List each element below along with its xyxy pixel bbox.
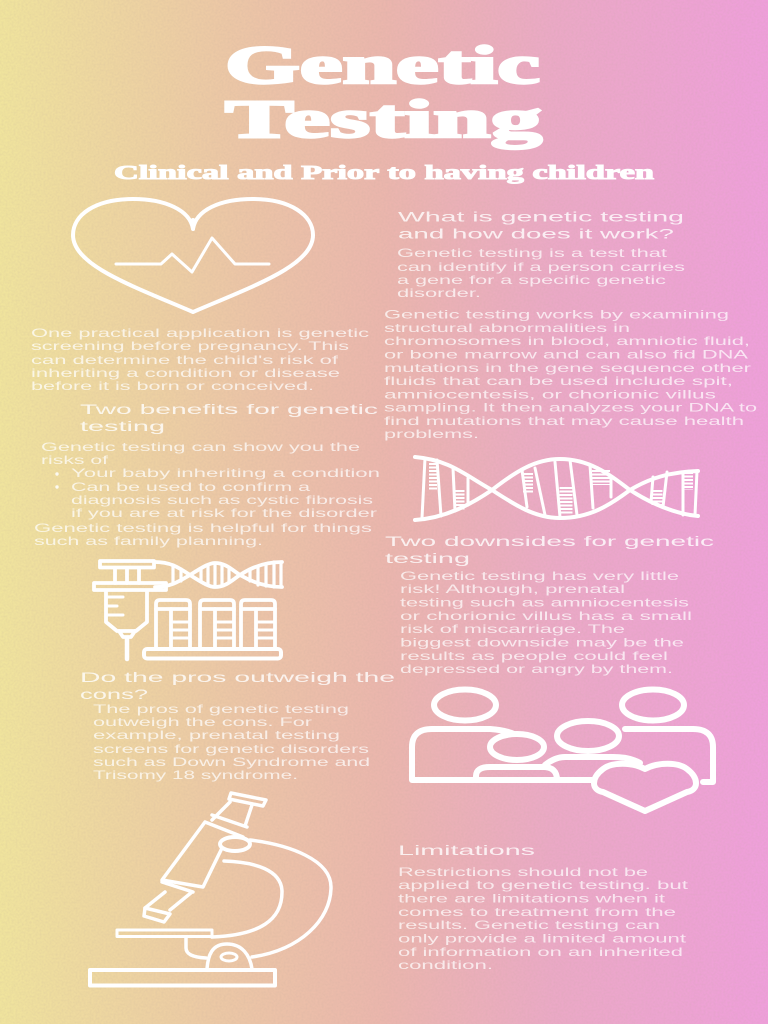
panel: practical application text [31, 326, 369, 393]
text block: how it works: Genetic testing works by examining [384, 308, 729, 322]
heading: what is genetic testing: What is genetic testing [398, 208, 684, 224]
text block: limitations: only provide a limited amount [398, 932, 687, 946]
text block: limitations: comes to treatment from the [398, 905, 677, 919]
text block: limitations: applied to genetic testing. but [398, 878, 689, 892]
text block: downsides: risk! Although, prenatal [400, 582, 625, 596]
DNA strand [155, 562, 282, 587]
text block: how it works: structural abnormalities in [384, 321, 630, 335]
panel: practical application text: One practical application is genetic [31, 326, 369, 340]
panel: two benefits [34, 401, 380, 548]
heading: two downsides: Two downsides for genetic [385, 533, 714, 549]
text block: how it works [384, 308, 758, 441]
text block: benefits list: if you are at risk for the disorder [71, 506, 377, 520]
text block: definition: Genetic testing is a test that [397, 246, 668, 260]
panel: practical application text: inheriting a condition or disease [31, 366, 341, 380]
text block: benefits list: such as family planning. [34, 534, 263, 548]
text block: benefits list: risks of [41, 453, 109, 467]
heading: pros vs cons: Do the pros outweigh the [80, 669, 395, 685]
heading: what is genetic testing [398, 208, 684, 242]
text block: pros vs cons [93, 702, 370, 782]
text block: downsides: Genetic testing has very little [400, 569, 680, 583]
text block: pros vs cons: Trisomy 18 syndrome. [93, 768, 298, 782]
text block: how it works: chromosomes in blood, amniotic fluid, [384, 334, 750, 348]
text block: downsides: testing such as amniocentesis [400, 596, 689, 610]
text block: benefits list [34, 440, 380, 548]
heading: two benefits [80, 401, 378, 434]
icon: microscope [90, 793, 331, 986]
title: Testing [225, 89, 542, 149]
heading: two benefits: Two benefits for genetic [80, 401, 378, 417]
title [225, 35, 542, 149]
text block: benefits list: Can be used to confirm a [71, 480, 311, 494]
syringe [94, 561, 166, 659]
heading: pros vs cons: cons? [80, 686, 148, 702]
heading: what is genetic testing: and how does it work? [398, 226, 674, 242]
icon: DNA helix [415, 457, 698, 520]
text block: how it works: problems. [384, 427, 479, 441]
heading: pros vs cons [80, 669, 395, 702]
text block: pros vs cons: example, prenatal testing [93, 728, 340, 742]
text block: downsides: or chorionic villus has a small [400, 609, 692, 623]
text block: how it works: or bone marrow and can also fid DNA [384, 348, 748, 362]
text block: downsides [400, 569, 692, 676]
text block: benefits list: Genetic testing is helpful for things [34, 521, 372, 535]
text block: downsides: results as people could feel [400, 649, 668, 663]
text block: benefits list: Your baby inheriting a condition [71, 466, 380, 480]
text block: pros vs cons: The pros of genetic testing [93, 702, 349, 716]
panel: practical application text: before it is born or conceived. [31, 379, 314, 393]
text block: benefits list: diagnosis such as cystic fibrosis [71, 493, 373, 507]
heading: two downsides [385, 533, 714, 566]
text block: limitations: condition. [398, 958, 493, 972]
panel: what is genetic testing [384, 208, 758, 441]
title: Genetic [225, 35, 540, 95]
text block: limitations: of information on an inherited [398, 945, 683, 959]
text block: benefits list: Genetic testing can show you the [41, 440, 361, 454]
icon: family with heart [412, 690, 713, 811]
text block: pros vs cons: such as Down Syndrome and [93, 755, 370, 769]
text block: definition: a gene for a specific genetic [397, 273, 666, 287]
text block: how it works: sampling. It then analyzes your DNA to [384, 400, 758, 414]
text block: definition: can identify if a person carries [397, 260, 685, 274]
text block: pros vs cons: screens for genetic disorders [93, 742, 369, 756]
text block: limitations [398, 865, 689, 972]
text block: pros vs cons: outweigh the cons. For [93, 715, 312, 729]
text block: downsides: biggest downside may be the [400, 636, 685, 650]
text block: limitations: there are limitations when it [398, 892, 666, 906]
test tubes [144, 600, 281, 658]
heading: two downsides: testing [385, 550, 470, 566]
text block: how it works: amniocentesis, or chorionic villus [384, 388, 716, 402]
panel: practical application text: can determine the child's risk of [31, 353, 339, 367]
text block: downsides: risk of miscarriage. The [400, 622, 626, 636]
icon: syringe, DNA and test tubes [94, 561, 282, 659]
panel: limitations [398, 842, 689, 972]
text block: definition: disorder. [397, 286, 481, 300]
panel: pros outweigh cons [80, 669, 395, 782]
panel: practical application text: screening before pregnancy. This [31, 339, 349, 353]
text block: limitations: Restrictions should not be [398, 865, 649, 879]
subtitle: Clinical and Prior to having children [114, 162, 655, 184]
text block: definition [397, 246, 685, 300]
text block: downsides: depressed or angry by them. [400, 662, 673, 676]
text block: how it works: mutations in the gene sequence other [384, 361, 751, 375]
text block: how it works: find mutations that may cause health [384, 414, 744, 428]
heading: two benefits: testing [80, 418, 165, 434]
icon: heart with pulse line [73, 199, 313, 312]
heading: limitations: Limitations [398, 842, 535, 858]
text block: how it works: fluids that can be used include spit, [384, 374, 733, 388]
text block: limitations: results. Genetic testing can [398, 918, 660, 932]
panel: two downsides [385, 533, 714, 676]
